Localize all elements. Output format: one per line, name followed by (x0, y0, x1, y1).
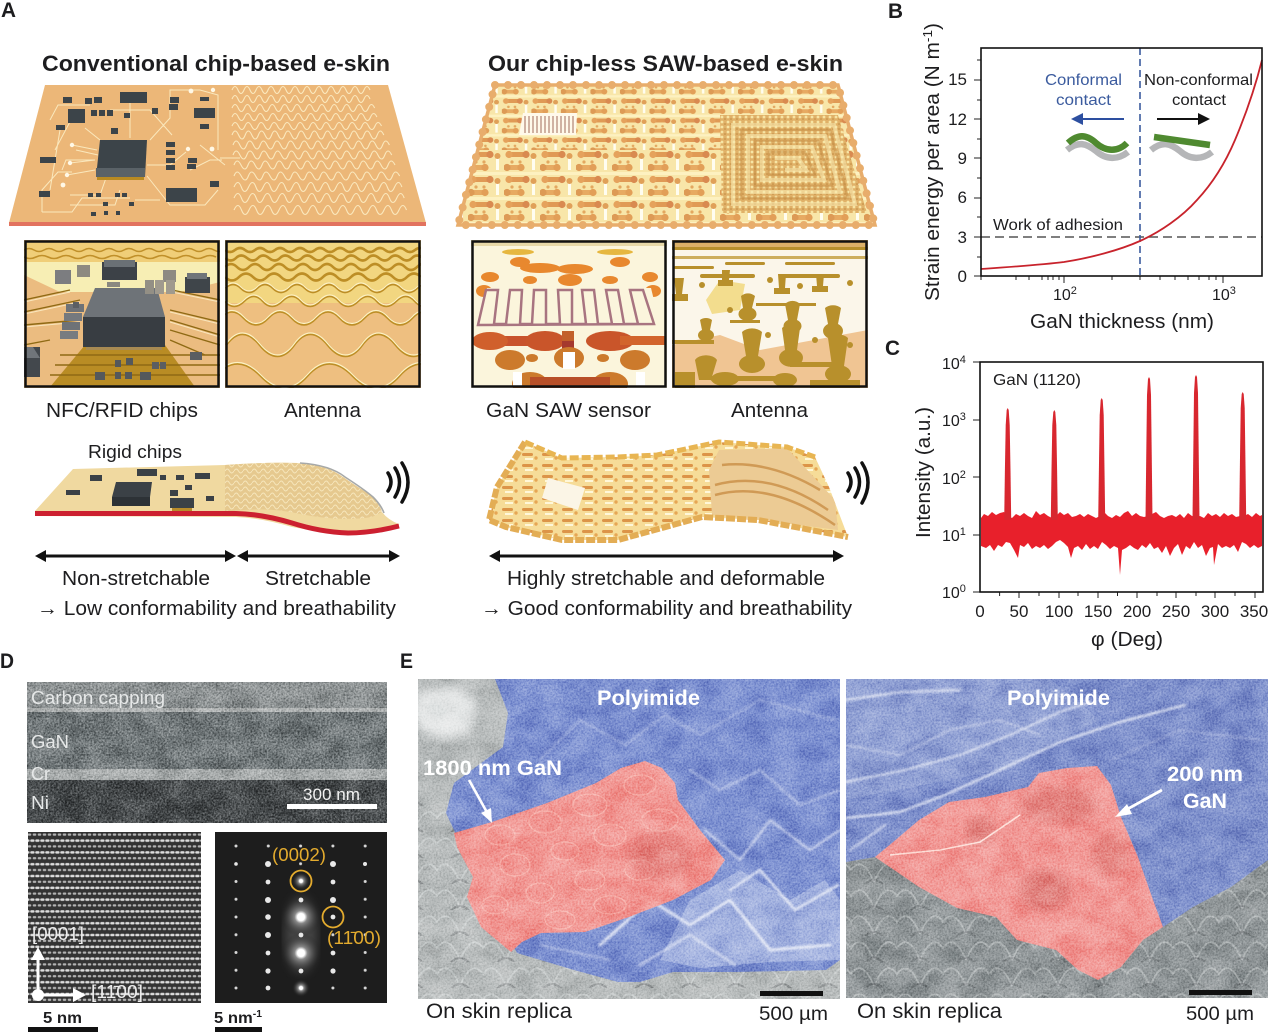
x-axis title: φ (Deg) (1091, 629, 1163, 651)
x tick labels: 10 (1053, 287, 1071, 304)
label: 200 nm GaN: 200 nm (1167, 763, 1243, 786)
circle on 0002 spot (290, 870, 312, 892)
y tick labels: 12 (948, 110, 967, 129)
icon: conformal film (1067, 136, 1128, 158)
y tick labels: 2 (960, 469, 966, 481)
y tick labels: 10 (942, 356, 960, 373)
spot label 0002: (0002) (272, 845, 326, 865)
noise baseline (981, 511, 1262, 575)
heading: conventional e-skin: Conventional chip-based e-skin (42, 51, 390, 76)
panel D: electron microscopy (0, 650, 387, 1032)
SEM image: 1800 nm GaN (413, 679, 840, 999)
spiral antenna on mesh (720, 115, 867, 213)
y tick labels: 9 (958, 149, 967, 168)
label: work of adhesion: Work of adhesion (993, 217, 1123, 234)
scale bar right (1189, 990, 1252, 995)
label: non-stretchable: Non-stretchable (62, 568, 210, 590)
y tick labels: 0 (958, 267, 967, 286)
y tick labels: 10 (942, 471, 960, 488)
scale bar 5 nm: 5 nm (43, 1010, 82, 1027)
y tick labels: 6 (958, 188, 967, 207)
panel letter D: D (0, 650, 14, 673)
scale bar 5 nm (28, 1010, 98, 1032)
x tick labels: 150 (1084, 602, 1112, 621)
scale bar 5 inverse nm: -1 (253, 1009, 262, 1020)
direction label 0001: [0001] (32, 924, 84, 944)
label: conformal contact (1045, 72, 1122, 109)
axis ticks (973, 362, 1255, 598)
panel C: phi scan chart (885, 337, 1268, 651)
large chip (83, 288, 165, 350)
x tick labels: 100 (1045, 602, 1073, 621)
direction label 1-100: [11̄00] (91, 982, 143, 1002)
y tick labels: 3 (958, 228, 967, 247)
y tick labels (942, 354, 966, 602)
panel E: skin replica SEM (400, 650, 1268, 1025)
x-axis title: GaN thickness (nm) (1030, 311, 1214, 333)
layer label: carbon capping: Carbon capping (31, 688, 165, 708)
axes ticks (974, 60, 1223, 283)
arrow: non-conformal (1157, 113, 1210, 125)
inset: mesh antenna (672, 240, 868, 388)
x tick labels: 200 (1123, 602, 1151, 621)
icon: wireless waves right (848, 463, 868, 503)
layer label: GaN: GaN (31, 732, 69, 752)
heading: SAW e-skin: Our chip-less SAW-based e-skin (488, 51, 843, 76)
circle on 1-100 spot (322, 906, 344, 928)
y tick labels: 0 (960, 583, 966, 595)
strain energy curve (981, 60, 1262, 269)
y tick labels: 10 (942, 528, 960, 545)
y tick labels: 10 (942, 585, 960, 602)
panel letter C: C (885, 337, 900, 360)
label: antenna left: Antenna (284, 400, 362, 422)
x tick labels: 50 (1010, 602, 1028, 621)
inset: serpentine antenna (225, 240, 421, 388)
y-axis title: Strain energy per area (N m (922, 53, 944, 301)
x tick labels: 350 (1240, 602, 1268, 621)
y tick labels: 1 (960, 526, 966, 538)
y tick labels: 15 (948, 70, 967, 89)
illustration: bent SAW device (485, 440, 850, 540)
icon: non-conformal film (1151, 137, 1212, 158)
illustration: conventional e-skin board (9, 85, 426, 226)
axes arrows (31, 947, 86, 1002)
x tick labels (975, 602, 1268, 621)
y tick labels: 4 (960, 354, 966, 366)
layer label: Cr: Cr (31, 764, 50, 784)
label: GaN SAW sensor: GaN SAW sensor (486, 400, 651, 422)
label: polyimide right: Polyimide (1007, 687, 1110, 710)
caption: on skin replica right: On skin replica (857, 1000, 1002, 1023)
label: highly stretchable: Highly stretchable and deformable (507, 568, 825, 590)
plot frame (981, 48, 1262, 276)
x tick labels: 250 (1162, 602, 1190, 621)
scale bar left (760, 991, 823, 996)
panel letter B: B (888, 0, 903, 23)
spot label 1-100: (11̄00) (327, 928, 381, 948)
panel letter E: E (400, 650, 413, 673)
label: NFC/RFID chips: NFC/RFID chips (46, 400, 198, 422)
y tick labels: 10 (942, 413, 960, 430)
label: non-conformal contact: Non-conformal (1144, 72, 1253, 89)
label: non-conformal contact: contact (1172, 92, 1227, 109)
scale bar 300 nm (287, 786, 377, 809)
x tick labels (1053, 285, 1236, 304)
label: conformal contact: Conformal (1045, 72, 1122, 89)
label: polyimide left: Polyimide (597, 687, 700, 710)
arrow: non-stretchable span (35, 550, 236, 562)
label: 200 nm GaN: GaN (1183, 790, 1227, 813)
label: antenna right: Antenna (731, 400, 809, 422)
label: rigid chips: Rigid chips (88, 442, 182, 462)
y-axis title: -1 (920, 30, 935, 42)
work of adhesion line (981, 236, 1262, 238)
conclusion: low conformability: → Low conformability and breathability (37, 598, 396, 620)
scale bar 5 inverse nm (214, 1009, 262, 1032)
scale label right: 500 µm (1186, 1004, 1254, 1025)
arrow: to 200 nm film (1115, 790, 1162, 817)
label: conformal contact: contact (1056, 92, 1112, 109)
conclusion: good conformability: → Good conformability and breathability (481, 598, 852, 620)
micrograph: cross-section TEM (27, 682, 387, 823)
x tick labels: 10 (1212, 287, 1230, 304)
y tick labels: 3 (960, 411, 966, 423)
scale bar 300 nm: 300 nm (303, 786, 360, 804)
threshold line (1139, 48, 1141, 276)
plot frame (980, 362, 1263, 592)
icon: wireless waves left (388, 463, 408, 502)
scale bar 5 inverse nm: 5 nm (214, 1010, 251, 1027)
illustration: bent conventional device (35, 463, 399, 535)
panel B: strain energy chart (888, 0, 1262, 333)
label: 1800 nm GaN: 1800 nm GaN (423, 757, 562, 780)
x tick labels: 0 (975, 602, 985, 621)
label: non-conformal contact (1144, 72, 1253, 109)
layer label: Ni: Ni (31, 793, 49, 813)
y tick labels (948, 70, 967, 286)
x tick labels: 3 (1230, 285, 1236, 297)
y-axis title: ) (922, 23, 944, 30)
caption: on skin replica left: On skin replica (426, 1000, 572, 1023)
micrograph: atomic lattice (28, 832, 201, 1003)
diffraction peaks (1004, 375, 1246, 520)
y-axis title: Intensity (a.u.) (913, 407, 935, 538)
scale label left: 500 µm (759, 1004, 828, 1025)
arrow: highly stretchable span (489, 550, 844, 562)
illustration: chip-less e-skin mesh (458, 85, 875, 225)
label: stretchable: Stretchable (265, 568, 371, 590)
label: 200 nm GaN (1167, 763, 1243, 813)
x tick labels: 2 (1071, 285, 1077, 297)
inset: NFC/RFID chips (24, 240, 220, 388)
arrow: stretchable span (237, 550, 400, 562)
micrograph: diffraction pattern (215, 832, 387, 1003)
plane label: GaN (1120) (993, 372, 1081, 389)
panel A: chip-based versus chip-less e-skin (1, 0, 875, 620)
arrow: to 1800 nm film (469, 780, 492, 823)
comb electrode (478, 288, 660, 325)
arrow: conformal (1071, 113, 1124, 125)
SEM image: 200 nm GaN (846, 679, 1268, 998)
x tick labels: 300 (1201, 602, 1229, 621)
inset: GaN SAW sensor (471, 240, 667, 388)
SAW sensor on mesh (519, 113, 577, 135)
